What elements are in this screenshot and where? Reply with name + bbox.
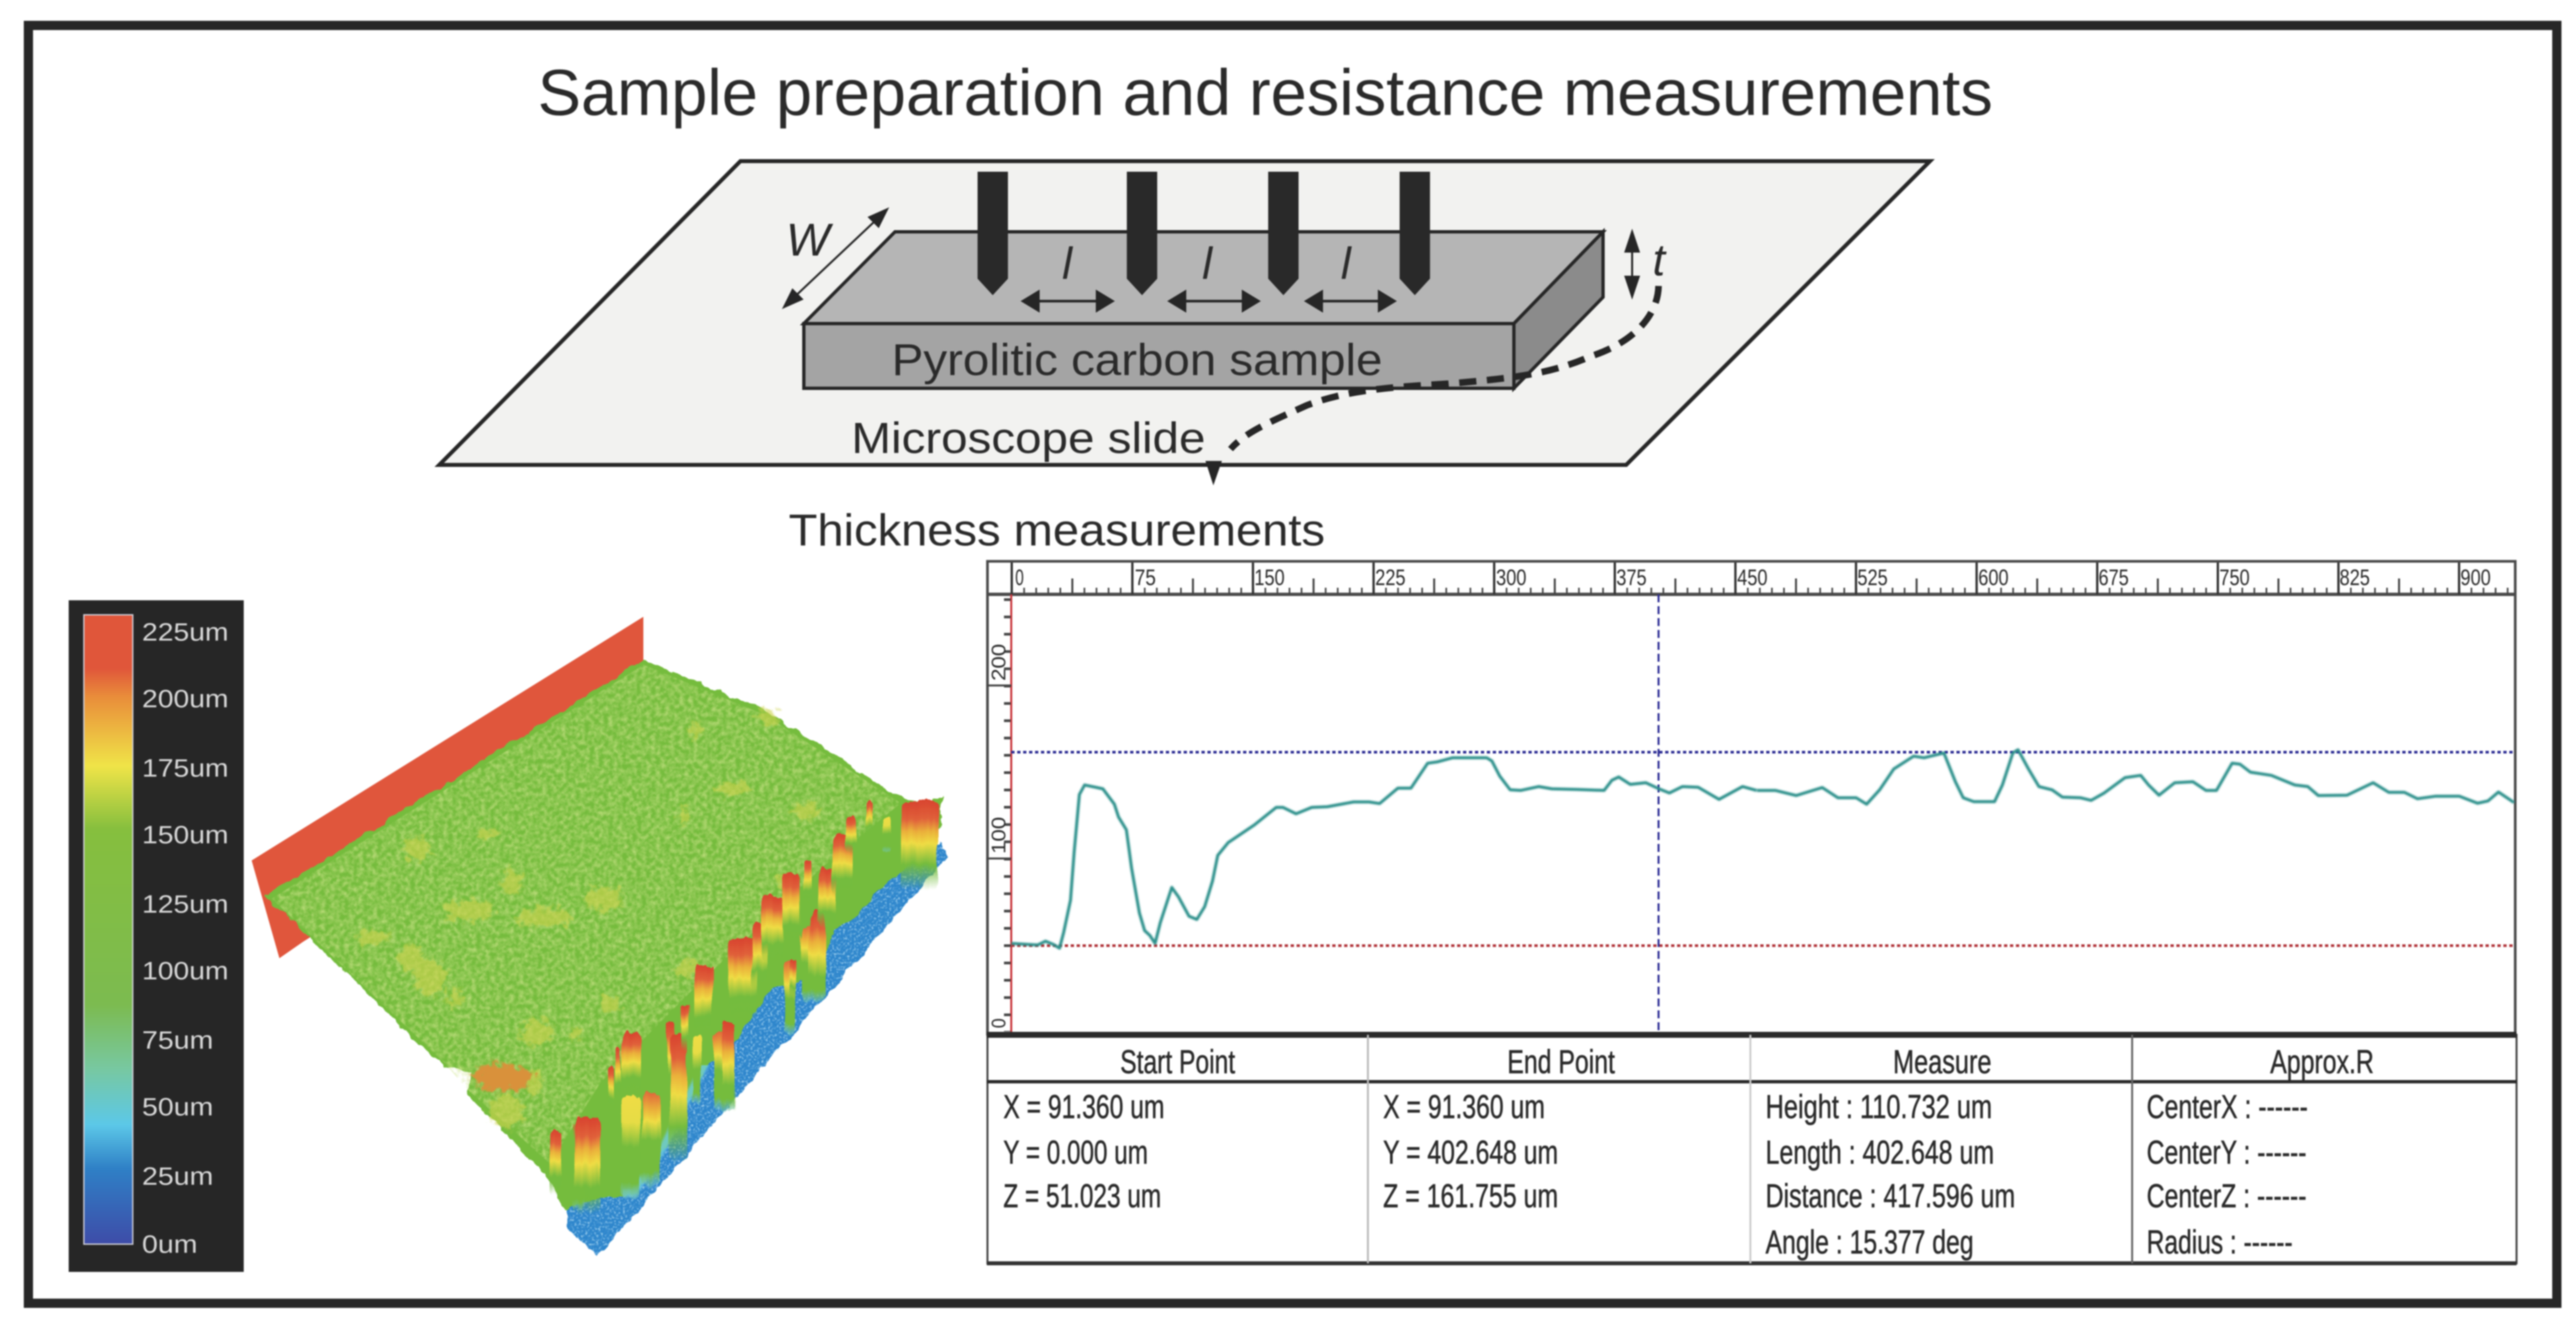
green plateau [266,660,943,1209]
3D surface topography map [252,617,947,1256]
table frame and grid [987,1035,2517,1263]
colour scale labels: 25um [142,1163,213,1191]
red lower reference line [1011,944,2514,947]
blue vertical cursor [1658,594,1659,1032]
sample label: Pyrolitic carbon sample [892,335,1382,385]
microscope slide [439,161,1930,465]
width label W: W [786,214,834,265]
x-axis ruler: 525 [1857,565,1888,590]
spacing labels l: l [1062,238,1073,289]
measure values [1766,1088,2015,1261]
measurement table [987,1035,2517,1263]
start point values: Y = 0.000 um [1003,1134,1148,1171]
colour scale labels: 50um [142,1094,213,1121]
thickness profile trace [1011,750,2514,948]
line scan chart [987,561,2515,1034]
colour scale labels: 200um [142,685,229,713]
measure values: Height : 110.732 um [1766,1088,1992,1125]
y-axis ruler: 100 [988,817,1010,854]
y-axis ruler [987,594,1011,1033]
x-axis ruler: 0 [1015,565,1024,590]
colour scale labels: 0um [142,1231,197,1259]
x-axis ruler: 675 [2098,565,2129,590]
thickness arrow [1626,232,1639,297]
spacing arrows [1023,292,1394,310]
cyan transition along the blue base [567,850,929,1202]
approximate radius values: CenterZ : ------ [2147,1177,2307,1214]
yellow raised patches [357,709,818,1128]
table headers: Measure [1893,1043,1991,1080]
blue base speckle [567,844,947,1256]
start point values: Z = 51.023 um [1003,1177,1161,1214]
table headers [1120,1043,2374,1080]
approximate radius values: Radius : ------ [2147,1224,2293,1261]
surface texture [272,665,901,1164]
x-axis ruler: 225 [1375,565,1406,590]
x-axis ruler: 825 [2340,565,2370,590]
dashed arrow to thickness measurements [1205,286,1659,485]
x-axis ruler [987,565,2515,594]
measure values: Angle : 15.377 deg [1766,1224,1974,1261]
start point values [1003,1088,1164,1214]
x-axis ruler: 900 [2460,565,2491,590]
end point values [1383,1088,1558,1214]
x-axis ruler: 375 [1616,565,1647,590]
x-axis ruler: 300 [1496,565,1526,590]
colour scale labels: 225um [142,619,229,647]
colour scale labels: 150um [142,822,229,849]
spacing labels l: l [1341,238,1352,289]
end point values: Y = 402.648 um [1383,1134,1558,1171]
edge peaks [550,802,939,1214]
diagram: sample on microscope slide [439,161,1930,485]
slide label: Microscope slide [851,413,1205,462]
measure values: Distance : 417.596 um [1766,1177,2015,1214]
x-axis ruler: 750 [2219,565,2250,590]
red back wall [252,617,643,958]
thickness label t: t [1653,235,1667,285]
x-axis ruler: 75 [1135,565,1156,590]
table headers: Approx.R [2270,1043,2374,1080]
colour scale labels: 175um [142,755,229,783]
end point values: X = 91.360 um [1383,1088,1545,1125]
heading: thickness measurements: Thickness measurements [789,505,1325,555]
colour scale legend [69,600,244,1272]
table headers: Start Point [1120,1043,1235,1080]
blue base [567,844,947,1256]
spacing labels l: l [1202,238,1213,289]
end point values: Z = 161.755 um [1383,1177,1558,1214]
x-axis ruler: 600 [1978,565,2009,590]
start point values: X = 91.360 um [1003,1088,1164,1125]
colour scale labels [142,619,229,1259]
title: Sample preparation and resistance measurements [538,56,1993,129]
colour scale labels: 75um [142,1027,213,1055]
spacing labels l [1062,238,1352,289]
table headers: End Point [1507,1043,1615,1080]
measure values: Length : 402.648 um [1766,1134,1994,1171]
plot background [987,561,2515,1034]
x-axis ruler: 450 [1737,565,1768,590]
x-axis ruler: 150 [1254,565,1285,590]
colour scale labels: 125um [142,891,229,919]
orange raised patch [472,1065,533,1091]
width arrow [784,209,887,307]
colour scale labels: 100um [142,958,229,985]
approximate radius values: CenterX : ------ [2147,1088,2308,1125]
y-axis ruler: 200 [988,644,1010,681]
y-axis ruler: 0 [988,1018,1010,1028]
blue upper reference line [1011,751,2514,753]
pyrolitic carbon sample block [804,232,1603,388]
approximate radius values: CenterY : ------ [2147,1134,2307,1171]
approximate radius values [2147,1088,2308,1261]
four measurement probes [978,172,1430,295]
